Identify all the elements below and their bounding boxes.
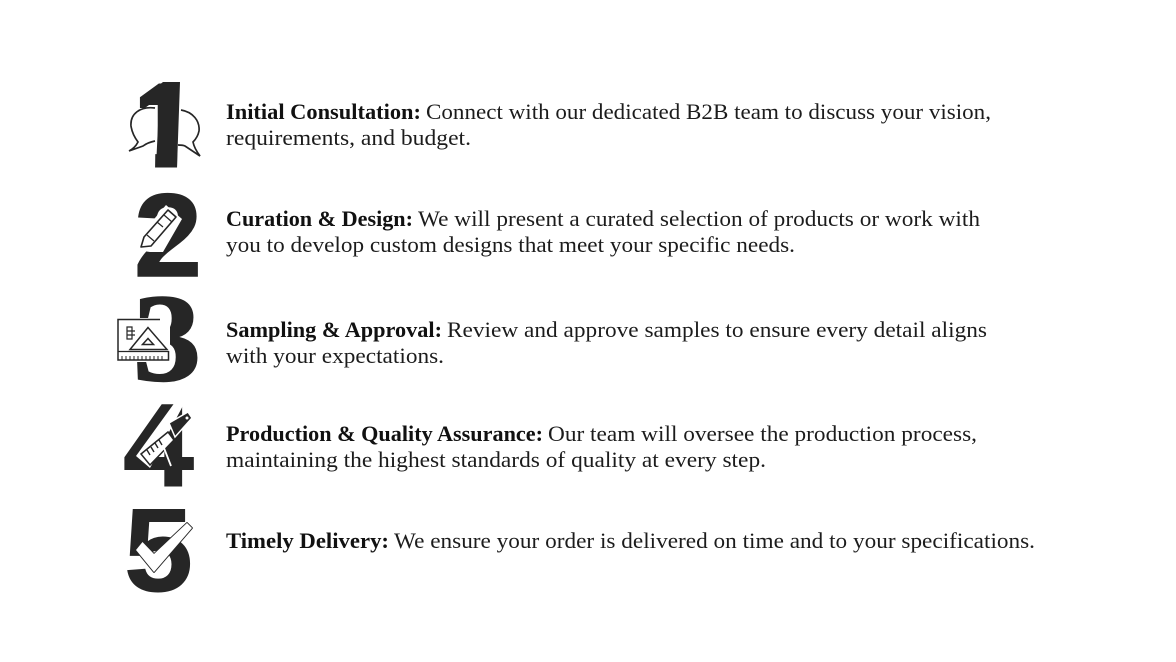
step 2 [134, 170, 980, 302]
step 3 text: Sampling & Approval: [226, 317, 442, 342]
step 2 text: you to develop custom designs that meet your specific needs. [226, 232, 795, 257]
numeral 4: 4 [123, 380, 194, 512]
white trim shaping the numeral 1 [125, 82, 200, 172]
step 4 text: maintaining the highest standards of quality at every step. [226, 447, 766, 472]
step 4 text: Our team will oversee the production process, [548, 421, 977, 446]
step 1 text: Initial Consultation: [226, 99, 421, 124]
step 3 text [226, 317, 987, 368]
icon: speech bubbles [129, 108, 200, 156]
numeral 1: 1 [133, 57, 193, 193]
icon: check mark [136, 523, 192, 572]
icon: pencil and ruler [136, 398, 192, 468]
step 2 text [226, 206, 980, 257]
step 2 text: We will present a curated selection of products or work with [418, 206, 980, 231]
step 5 [124, 485, 1035, 617]
step 1 text: Connect with our dedicated B2B team to discuss your vision, [426, 99, 991, 124]
step 5 text: Timely Delivery: [226, 528, 389, 553]
icon: pencil [136, 205, 182, 252]
step 4 [123, 380, 977, 512]
step 3 text: with your expectations. [226, 343, 444, 368]
step 4 text [226, 421, 977, 472]
step 3 [116, 270, 987, 408]
step 2 text: Curation & Design: [226, 206, 413, 231]
numeral 5: 5 [124, 485, 193, 617]
step 1 text: requirements, and budget. [226, 125, 471, 150]
numeral 1 stem reinforcement [145, 82, 180, 167]
step 1 text [226, 99, 991, 150]
step 1 [125, 57, 991, 193]
step 3 text: Review and approve samples to ensure every detail aligns [447, 317, 987, 342]
numeral 3: 3 [133, 270, 201, 408]
icon: drafting board [116, 318, 170, 362]
numeral 2: 2 [134, 170, 202, 302]
step 4 text: Production & Quality Assurance: [226, 421, 543, 446]
step 5 text: We ensure your order is delivered on time and to your specifications. [394, 528, 1035, 553]
